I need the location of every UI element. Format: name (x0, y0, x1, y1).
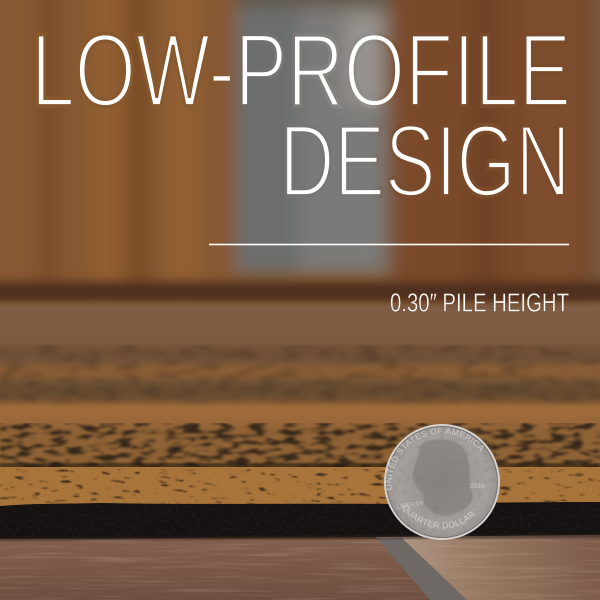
background: blurred curtains and window (0, 0, 600, 310)
coin: US quarter: LIBERTY (396, 500, 425, 511)
rug: dark patterned band (0, 416, 600, 469)
coin: US quarter (384, 424, 500, 540)
coin portrait (412, 439, 473, 516)
window sheer (236, 6, 388, 274)
wood floor (0, 534, 600, 600)
coin: US quarter: 2016 (470, 483, 485, 490)
right curtain (392, 0, 600, 300)
title (31, 13, 571, 218)
left curtain (0, 0, 235, 300)
rug: black braided edge (0, 502, 600, 539)
rug: blurred far rows (0, 304, 600, 424)
coin: US quarter: QUARTER DOLLAR (403, 504, 475, 529)
dark skirting at curtain base (0, 282, 600, 302)
rug: tan near row (0, 467, 600, 507)
divider rule (209, 244, 569, 245)
coin inscriptions: UNITED STATES OF AMERICA (386, 428, 484, 490)
